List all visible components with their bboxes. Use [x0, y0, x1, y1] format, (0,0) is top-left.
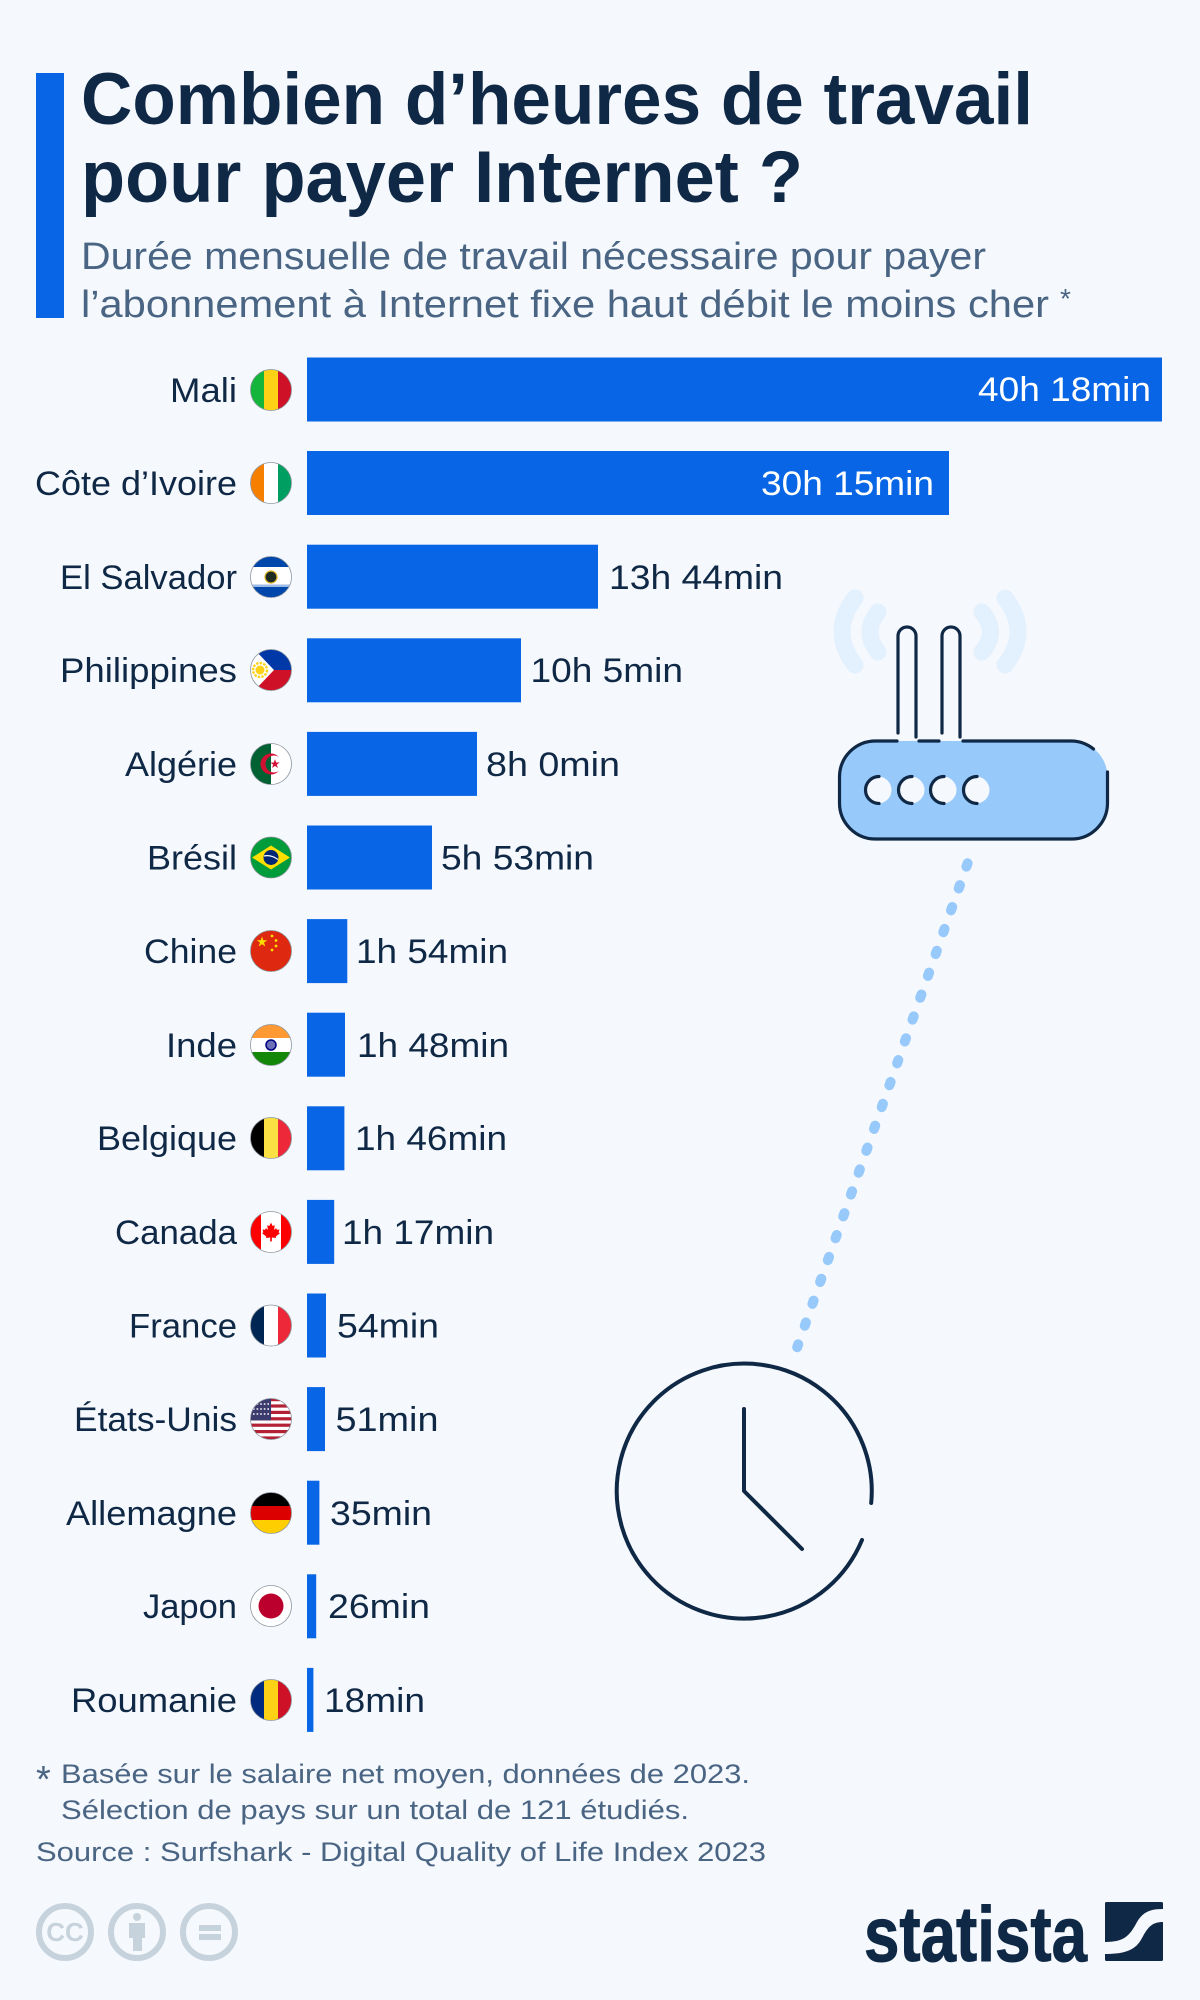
dotted connector	[797, 863, 968, 1347]
row: Algérie: Algérie	[125, 746, 237, 784]
row: États-Unis: États-Unis	[74, 1401, 237, 1439]
row: Mali: Mali	[170, 372, 237, 410]
footnote: Sélection de pays sur un total de 121 étudiés.	[61, 1795, 689, 1825]
icon: router	[840, 598, 1108, 839]
title: pour payer Internet ?	[81, 137, 803, 218]
router antennas	[898, 627, 960, 737]
row: Chine	[144, 919, 508, 983]
row: Canada: Canada	[115, 1214, 237, 1252]
subtitle	[81, 236, 1071, 326]
row: Algérie	[125, 732, 620, 796]
row: Allemagne: 35min	[330, 1495, 432, 1533]
statista wordmark: statista	[864, 1890, 1087, 1978]
row: Japon: Japon	[143, 1588, 237, 1626]
row: Belgique	[97, 1106, 507, 1170]
row: Inde	[166, 1013, 509, 1077]
row: El Salvador: El Salvador	[60, 559, 237, 597]
row: France: France	[129, 1308, 237, 1346]
row: États-Unis: 51min	[336, 1401, 438, 1439]
bar chart	[35, 358, 1162, 1732]
subtitle: l’abonnement à Internet fixe haut débit le moins cher	[81, 284, 1049, 326]
statista mark	[1105, 1902, 1163, 1961]
row: Algérie: 8h 0min	[486, 746, 620, 784]
title: Combien d’heures de travail	[81, 59, 1033, 140]
row: Japon	[143, 1574, 430, 1638]
source: Source : Surfshark - Digital Quality of Life Index 2023	[36, 1837, 766, 1867]
row: Allemagne	[66, 1481, 432, 1545]
row: Philippines	[60, 638, 683, 702]
row: Allemagne: Allemagne	[66, 1495, 237, 1533]
row: Belgique: Belgique	[97, 1120, 237, 1158]
row: Philippines: Philippines	[60, 652, 237, 690]
row: Canada: 1h 17min	[342, 1214, 494, 1252]
footnote: Basée sur le salaire net moyen, données de 2023.	[61, 1759, 750, 1789]
statista logo	[864, 1890, 1163, 1978]
row: Mali	[170, 358, 1162, 422]
icon: clock	[617, 1364, 872, 1619]
icon: no derivatives	[183, 1906, 235, 1958]
router wifi waves	[842, 598, 1018, 665]
row: El Salvador	[60, 545, 783, 609]
row: Côte d'Ivoire: Côte d’Ivoire	[35, 465, 237, 503]
row: Brésil: 5h 53min	[441, 840, 594, 878]
row: Mali: 40h 18min	[978, 371, 1151, 409]
subtitle: Durée mensuelle de travail nécessaire pour payer	[81, 236, 986, 278]
row: Inde: 1h 48min	[357, 1027, 509, 1065]
row: Chine: 1h 54min	[356, 933, 508, 971]
icon: attribution	[111, 1906, 163, 1958]
row: Philippines: 10h 5min	[530, 652, 683, 690]
icons: creative commons licence	[39, 1906, 235, 1958]
subtitle: *	[1060, 283, 1071, 314]
row: Roumanie: Roumanie	[71, 1682, 237, 1720]
footnote: *	[36, 1759, 51, 1801]
row: Brésil: Brésil	[147, 840, 237, 878]
row: Brésil	[147, 826, 594, 890]
icon: cc: CC	[46, 1917, 84, 1947]
router body	[840, 741, 1108, 839]
title accent bar	[36, 73, 64, 318]
row: Roumanie: 18min	[324, 1682, 425, 1720]
row: Canada	[115, 1200, 494, 1264]
row: Côte d'Ivoire	[35, 451, 949, 515]
row: Japon: 26min	[328, 1588, 430, 1626]
row: États-Unis	[74, 1387, 438, 1451]
title	[81, 59, 1033, 218]
footnote	[36, 1759, 750, 1825]
row: Belgique: 1h 46min	[355, 1120, 507, 1158]
icon: cc	[39, 1906, 91, 1958]
row: Chine: Chine	[144, 933, 237, 971]
row: El Salvador: 13h 44min	[609, 559, 783, 597]
row: France: 54min	[337, 1308, 439, 1346]
row: Côte d'Ivoire: 30h 15min	[761, 465, 934, 503]
row: Roumanie	[71, 1668, 425, 1732]
row: Inde: Inde	[166, 1027, 237, 1065]
row: France	[129, 1294, 439, 1358]
